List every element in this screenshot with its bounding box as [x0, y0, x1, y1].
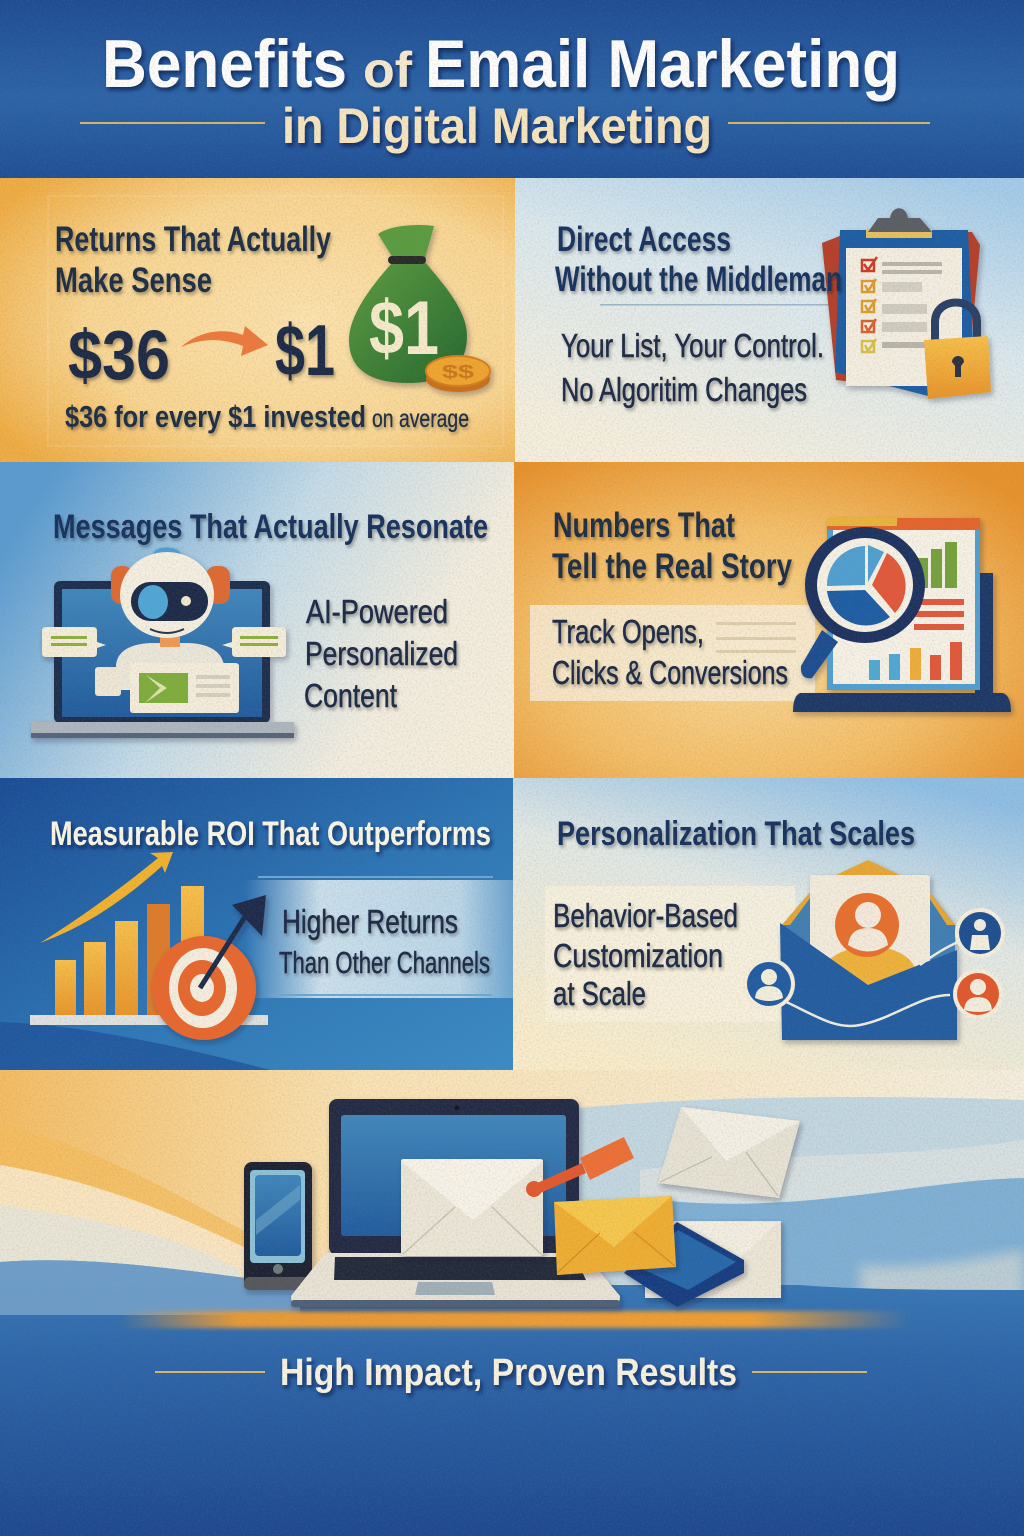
heading: direct access: Direct Access — [557, 220, 731, 259]
icon: money bag — [349, 225, 490, 392]
icon: money bag: $1 — [369, 286, 439, 371]
icon: ai robot on laptop — [31, 548, 294, 738]
icon: rising arrow — [40, 852, 173, 943]
panel: high impact banner — [0, 1070, 1024, 1536]
heading: direct access — [555, 220, 842, 299]
icon: money bag: $$ — [442, 362, 474, 382]
heading: numbers: Tell the Real Story — [552, 547, 792, 586]
panel: direct access — [515, 178, 1024, 462]
header — [0, 0, 1024, 178]
body text: behavior-based — [553, 897, 738, 1012]
heading: returns — [55, 220, 331, 300]
title — [102, 26, 900, 102]
chat bubble left — [42, 627, 106, 657]
icon: laptop — [291, 1099, 620, 1307]
panel: returns — [0, 178, 515, 462]
panel: measurable roi — [0, 778, 513, 1070]
chat bubble right — [222, 627, 286, 657]
panel: resonate — [0, 462, 514, 778]
subtitle: in Digital Marketing — [282, 98, 712, 154]
heading: returns: Returns That Actually — [55, 220, 331, 259]
body text: higher returns: Than Other Channels — [279, 945, 490, 980]
body text: higher returns — [279, 903, 490, 980]
icon: white envelope — [401, 1159, 543, 1256]
title: of — [363, 42, 412, 98]
body text: tracking: Clicks & Conversions — [552, 654, 788, 691]
title: Email Marketing — [425, 26, 900, 102]
body text: behavior-based: Behavior-Based — [553, 897, 738, 934]
closing tagline: High Impact, Proven Results — [280, 1352, 737, 1394]
caption: returns: $36 for every $1 invested — [65, 399, 366, 434]
body text: tracking: Track Opens, — [552, 613, 704, 650]
icon: yellow envelope — [554, 1196, 676, 1275]
heading: resonate: Messages That Actually Resonate — [53, 508, 488, 546]
body text: direct access: No Algoritim Changes — [561, 371, 807, 408]
panel: personalization — [513, 778, 1024, 1070]
bar chart — [30, 886, 268, 1025]
body text: higher returns: Higher Returns — [282, 903, 458, 940]
illustration: devices and envelopes — [244, 1099, 800, 1307]
heading: direct access: Without the Middleman — [555, 260, 842, 299]
body text: ai-powered: Content — [304, 677, 397, 714]
icon: tilted envelope — [658, 1107, 800, 1198]
heading: numbers — [552, 506, 792, 586]
stat: $36 to $1 — [68, 311, 335, 394]
icon: profile circle bottom — [953, 969, 1003, 1019]
heading: measurable roi: Measurable ROI That Outperforms — [50, 815, 491, 853]
heading: returns: Make Sense — [55, 261, 212, 300]
icon: envelope with profile card — [780, 860, 958, 1040]
icon: target with arrow — [152, 895, 266, 1040]
icon: orange tool — [526, 1137, 634, 1197]
body text: ai-powered: Personalized — [305, 635, 458, 672]
title: Benefits — [102, 26, 347, 102]
body text: direct access — [561, 327, 824, 408]
icon: blue booklet — [624, 1222, 744, 1307]
body text: ai-powered — [304, 593, 458, 714]
icon: arrow — [181, 326, 268, 356]
caption: returns: on average — [372, 405, 469, 433]
body text: behavior-based: at Scale — [553, 975, 646, 1012]
icon: clipboard and lock — [822, 208, 991, 399]
icon: profile circle top — [955, 908, 1005, 958]
icon: analytics report with magnifier — [793, 518, 1011, 712]
body text: direct access: Your List, Your Control. — [561, 327, 824, 364]
stat: $36 to $1: $36 — [68, 316, 170, 394]
body text: tracking — [552, 613, 788, 691]
body text: behavior-based: Customization — [553, 937, 723, 974]
heading: numbers: Numbers That — [553, 506, 735, 545]
heading: personalization: Personalization That Scales — [557, 815, 915, 853]
body text: ai-powered: AI-Powered — [306, 593, 448, 630]
icon: smartphone — [244, 1162, 312, 1290]
icon: profile circle left — [743, 958, 795, 1010]
icon: back envelope — [645, 1221, 781, 1298]
stat: $36 to $1: $1 — [275, 311, 335, 391]
panel: numbers — [514, 462, 1024, 778]
